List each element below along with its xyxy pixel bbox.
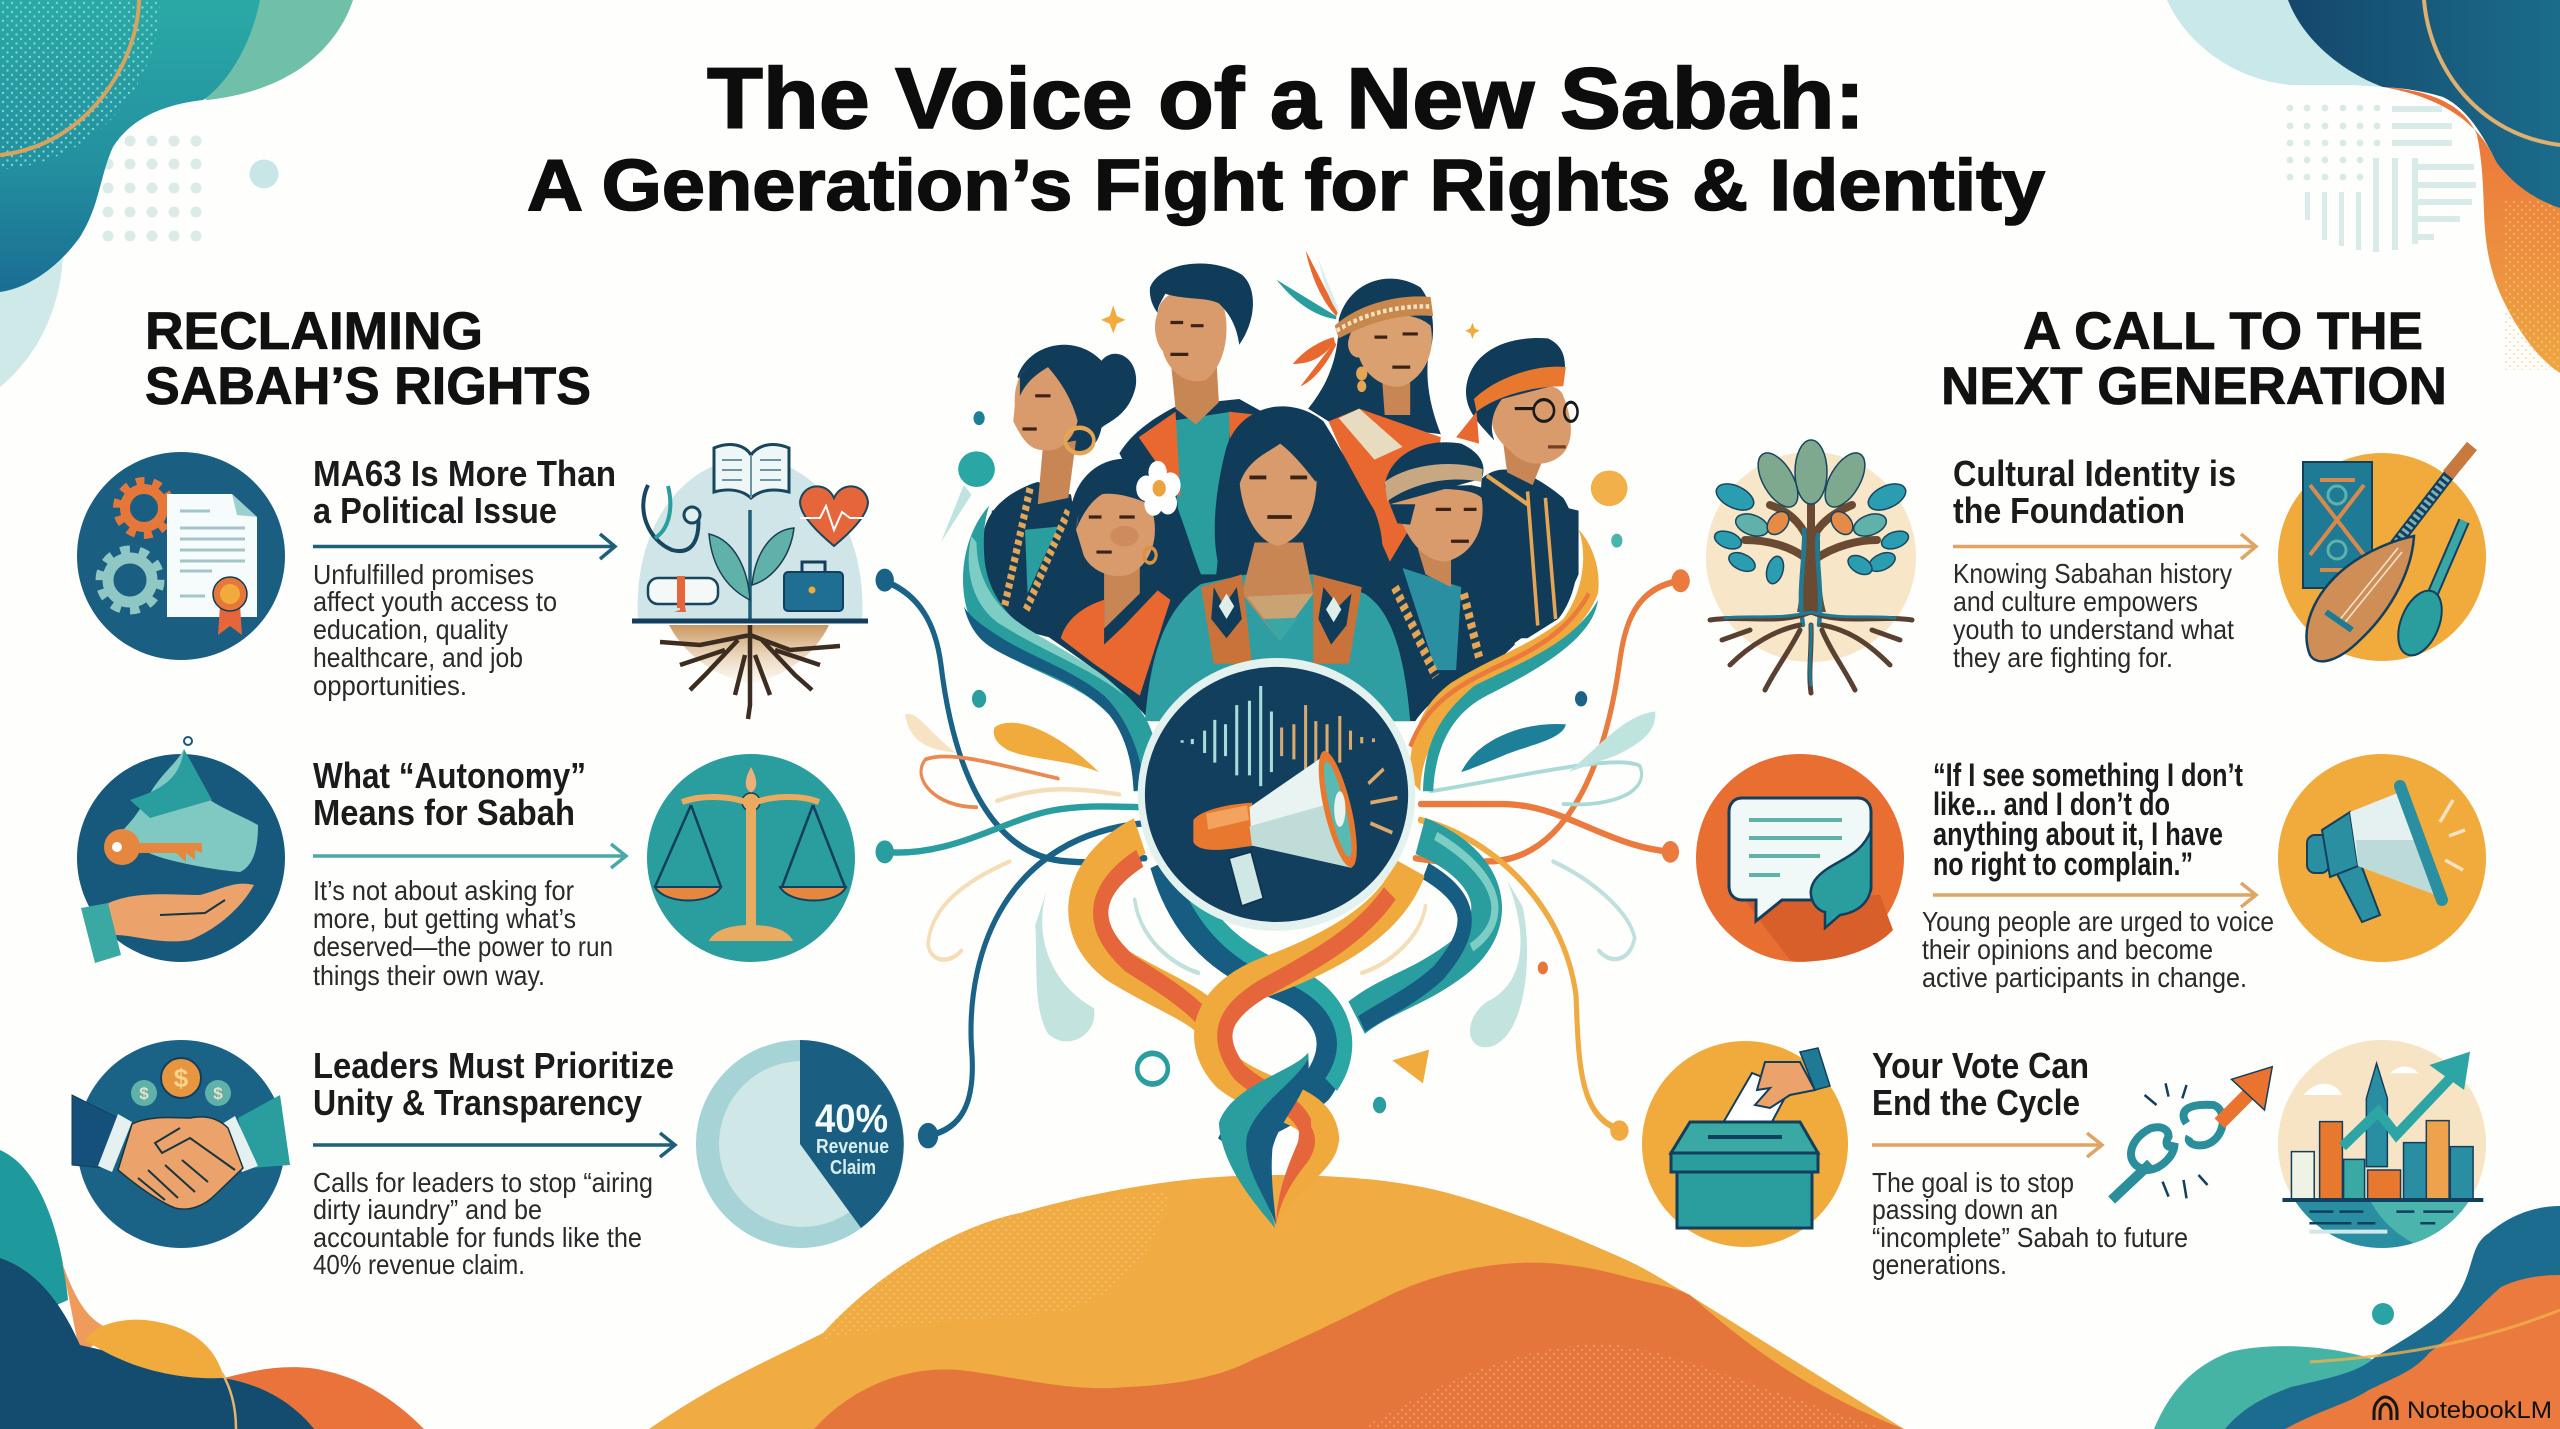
- body text: Young people are urged to voice: [1922, 906, 2274, 937]
- body text: Knowing Sabahan history: [1953, 558, 2232, 589]
- body text: things their own way.: [313, 960, 545, 991]
- icon: document and gears: [77, 452, 285, 660]
- heading: the Foundation: [1953, 490, 2185, 531]
- chart: 40% revenue claim pie: Revenue: [816, 1136, 889, 1158]
- body text: more, but getting what’s: [313, 903, 576, 934]
- chart: 40% revenue claim pie: Claim: [830, 1157, 876, 1179]
- central hill: [649, 1175, 1904, 1429]
- section: Reclaiming Sabah's Rights heading: [145, 302, 591, 416]
- arrow: [1953, 534, 2256, 559]
- arrow: [313, 1133, 675, 1157]
- heading: [1872, 1045, 2089, 1123]
- icon: woven textile, lute and maraca: [2278, 446, 2486, 662]
- heading: Unity & Transparency: [313, 1082, 642, 1123]
- icon: scales of justice: [647, 754, 855, 962]
- body text: 40% revenue claim.: [313, 1249, 525, 1280]
- orange end dots: [1662, 569, 1690, 863]
- heading: MA63 Is More Than: [313, 453, 616, 494]
- quote heading: anything about it, I have: [1933, 816, 2223, 852]
- section: A Call to the Next Generation heading: A CALL TO THE: [2023, 302, 2423, 361]
- icon: plant with education, health and work symbols: [632, 444, 868, 719]
- panel: Quote: [1696, 754, 2486, 993]
- section: A Call to the Next Generation heading: NEXT GENERATION: [1941, 357, 2447, 416]
- decorative corner: bottom left: [0, 1150, 424, 1429]
- person: tall young man: [1119, 264, 1263, 587]
- left upper ribbon: [963, 506, 1153, 791]
- heading: What “Autonomy”: [313, 755, 586, 796]
- section: Reclaiming Sabah's Rights heading: SABAH’S RIGHTS: [145, 357, 591, 416]
- body text: [1953, 558, 2234, 673]
- title: The Voice of a New Sabah:: [707, 51, 1865, 147]
- lower left looping ribbon: [1084, 836, 1209, 1024]
- title: [527, 51, 2045, 226]
- person: boy with woven cap: [1385, 442, 1515, 696]
- decorative corner: bottom right: [2154, 1206, 2560, 1429]
- panel: Cultural identity: [1706, 440, 2486, 693]
- body text: passing down an: [1872, 1194, 2058, 1225]
- quote heading: no right to complain.”: [1933, 846, 2193, 882]
- arrow: [1872, 1133, 2102, 1157]
- panel: Leaders: [72, 1040, 904, 1280]
- lower right looping ribbon: [1357, 836, 1495, 1024]
- heading: Leaders Must Prioritize: [313, 1045, 674, 1086]
- body text: active participants in change.: [1922, 962, 2247, 993]
- body text: their opinions and become: [1922, 934, 2213, 965]
- quote heading: [1933, 757, 2243, 882]
- decorative corner: top left: [0, 0, 353, 387]
- heading: Means for Sabah: [313, 792, 575, 833]
- body text: affect youth access to: [313, 586, 557, 617]
- body text: opportunities.: [313, 670, 467, 701]
- body text: Unfulfilled promises: [313, 559, 534, 590]
- quote heading: “If I see something I don’t: [1933, 757, 2243, 793]
- heading: End the Cycle: [1872, 1082, 2080, 1123]
- heading: Cultural Identity is: [1953, 453, 2236, 494]
- icon: speech bubbles: [1696, 754, 1904, 962]
- body text: It’s not about asking for: [313, 875, 574, 906]
- panel: Your vote: [1642, 1040, 2500, 1280]
- arrow: [313, 844, 626, 868]
- icon: rising city: [2278, 1040, 2486, 1248]
- body text: deserved—the power to run: [313, 931, 613, 962]
- thin connector curves: [882, 580, 1681, 1136]
- body text: accountable for funds like the: [313, 1222, 642, 1253]
- body text: [313, 875, 613, 991]
- splash shapes: [905, 712, 1655, 1047]
- body text: The goal is to stop: [1872, 1167, 2074, 1198]
- small floating marks: [941, 305, 1628, 1113]
- connector end dots: [876, 569, 938, 1148]
- person: central woman: [1145, 406, 1410, 721]
- heading: Your Vote Can: [1872, 1045, 2089, 1086]
- section: A Call to the Next Generation heading: [1941, 302, 2447, 416]
- chart: 40% revenue claim pie: [696, 1040, 904, 1248]
- megaphone: [1193, 746, 1397, 906]
- icon: handshake with coins: [72, 1040, 290, 1248]
- heading: [313, 1045, 674, 1123]
- person: man with glasses and orange headband: [1456, 338, 1578, 638]
- icon: handshake with coins: $: [174, 1063, 189, 1093]
- person: woman with feathered headband: [1277, 250, 1441, 562]
- icon: broken chain with arrow: [2112, 1067, 2272, 1200]
- arrow: [1933, 883, 2256, 907]
- arrow: [313, 534, 615, 559]
- panel: Autonomy: [77, 737, 855, 991]
- body text: “incomplete” Sabah to future: [1872, 1222, 2188, 1253]
- quote heading: like... and I don’t do: [1933, 786, 2170, 822]
- icon: tree with roots: [1706, 440, 1916, 693]
- body text: [313, 559, 557, 701]
- body text: healthcare, and job: [313, 642, 523, 673]
- chart: 40% revenue claim pie: 40%: [815, 1097, 888, 1141]
- central illustration: youth group, ribbons and megaphone: [876, 250, 1690, 1228]
- person: woman with hair bun: [982, 345, 1136, 638]
- twisted stem ribbons: [1165, 861, 1410, 1228]
- decorative corner: top right: [2167, 0, 2560, 373]
- body text: Calls for leaders to stop “airing: [313, 1167, 653, 1198]
- body text: education, quality: [313, 614, 508, 645]
- heading: [1953, 453, 2236, 531]
- body text: [1922, 906, 2274, 993]
- icon: handshake with coins: $: [139, 1084, 149, 1103]
- icon: ballot box: [1642, 1041, 1848, 1247]
- body text: dirty iaundry” and be: [313, 1194, 542, 1225]
- heading: [313, 453, 616, 531]
- logo: NotebookLM: NotebookLM: [2407, 1397, 2552, 1424]
- icon: handshake with coins: $: [213, 1084, 223, 1103]
- body text: [1872, 1167, 2188, 1280]
- body text: generations.: [1872, 1249, 2007, 1280]
- right upper ribbon: [1409, 530, 1599, 791]
- person: girl with flower: [1053, 459, 1201, 696]
- body text: and culture empowers: [1953, 586, 2198, 617]
- body text: [313, 1167, 653, 1280]
- icon: map, key and hand: [77, 737, 285, 963]
- body text: they are fighting for.: [1953, 642, 2173, 673]
- heading: [313, 755, 586, 833]
- title: A Generation’s Fight for Rights & Identity: [527, 146, 2045, 226]
- body text: youth to understand what: [1953, 614, 2234, 645]
- sound wave bars: [1182, 686, 1373, 786]
- panel: MA63: [77, 444, 868, 719]
- dark backing behind the group: [989, 485, 1579, 721]
- central voice circle with sound wave and megaphone: [1138, 658, 1415, 931]
- section: Reclaiming Sabah's Rights heading: RECLAIMING: [145, 302, 483, 361]
- heading: a Political Issue: [313, 490, 557, 531]
- icon: megaphone: [2278, 754, 2486, 962]
